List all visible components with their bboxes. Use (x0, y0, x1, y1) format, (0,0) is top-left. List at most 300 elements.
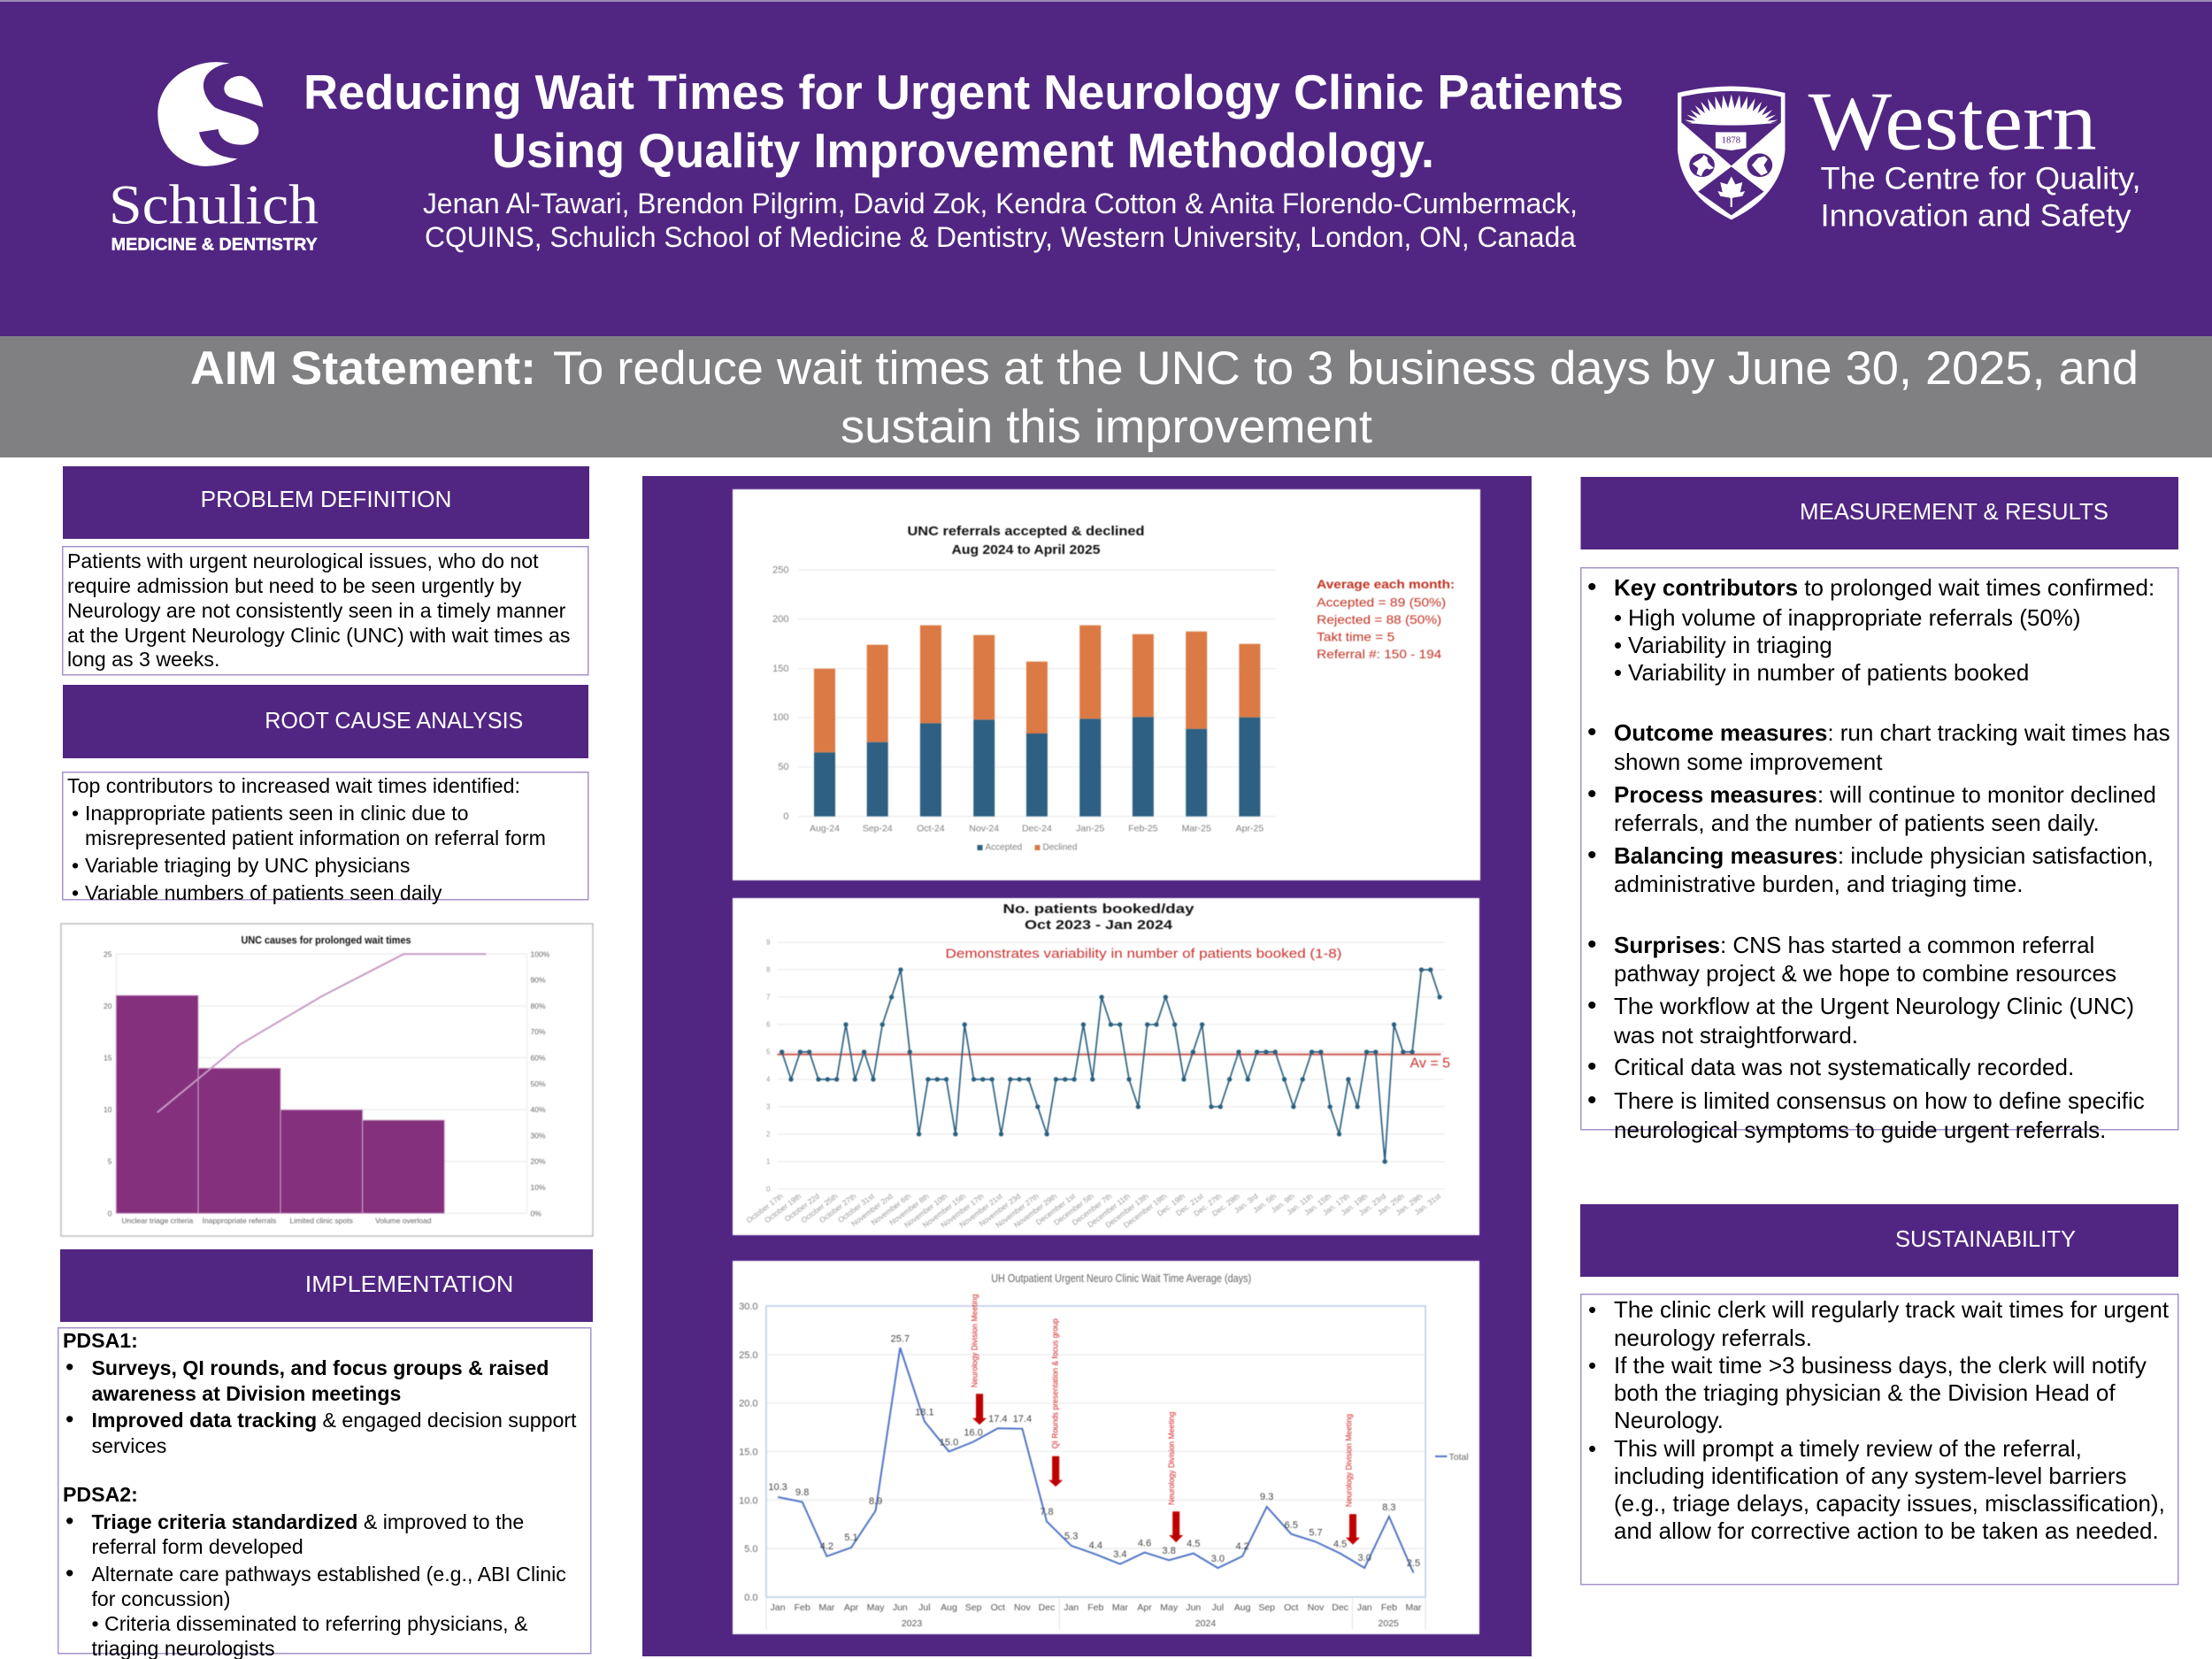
logo subtitle: MEDICINE & DENTISTRY (111, 234, 318, 254)
chart: Pareto causes for prolonged wait times: 5 (107, 1157, 111, 1166)
data labels: 18.1 (915, 1407, 933, 1417)
PDSA2 items: Criteria disseminated to referring physicians, & (104, 1612, 528, 1635)
Western logo (1678, 75, 2141, 234)
chart: wait time average run chart: Aug (1233, 1602, 1250, 1613)
chart: wait time average run chart: 2024 (1194, 1618, 1216, 1629)
text block: problem definition: at the Urgent Neurology Clinic (UNC) with wait times as (67, 624, 570, 647)
date axis labels: November 17th (939, 1191, 986, 1230)
PDSA2 items: • (92, 1612, 99, 1635)
date axis labels: October 31st (836, 1191, 876, 1225)
text block: root cause contributors: misrepresented patient information on referral form (85, 826, 546, 849)
surprises: • (1587, 1086, 1597, 1115)
data labels: 5.1 (844, 1532, 857, 1543)
chart: patients booked per day: 7 (766, 993, 771, 1002)
date axis labels: October 19th (763, 1191, 803, 1225)
chart: Pareto causes for prolonged wait times: 20% (530, 1157, 545, 1166)
chart: Pareto causes for prolonged wait times: 60% (530, 1053, 545, 1062)
chart: Pareto causes for prolonged wait times: 0 (107, 1209, 111, 1217)
AIM statement band: AIM Statement: (190, 342, 536, 395)
date axis labels: November 21st (957, 1191, 1004, 1229)
text block: sustainability plan: Neurology. (1614, 1407, 1724, 1433)
data labels: 10.3 (768, 1482, 787, 1493)
annotation: QI Rounds presentation: QI Rounds presentation & focus group (1050, 1318, 1060, 1448)
annotation: Neurology Division Meeting 2 (1166, 1412, 1183, 1542)
date axis labels: November 2nd (849, 1191, 894, 1228)
chart: wait time average run chart: May (1160, 1602, 1178, 1613)
chart: wait time average run chart: Dec (1332, 1602, 1348, 1613)
key contributors: High volume of inappropriate referrals (50%) (1628, 604, 2081, 631)
logo subtitle: Innovation and Safety (1821, 199, 2131, 234)
text block: root cause contributors: • (72, 854, 79, 877)
chart: wait time average run chart: Apr (1137, 1602, 1152, 1613)
declined bars (814, 626, 1260, 752)
panel: sustainability (1580, 1204, 2178, 1586)
date axis labels: October 27th (818, 1191, 857, 1225)
data labels: 3.8 (1162, 1546, 1175, 1556)
chart: wait time average run chart: Mar (1405, 1602, 1422, 1613)
chart: Pareto causes for prolonged wait times: 30% (530, 1131, 545, 1140)
PDSA1 items: Improved data tracking & engaged decision support (92, 1409, 577, 1432)
chart: wait time average run chart: 5.0 (744, 1544, 757, 1555)
chart: wait time average run chart: Oct (990, 1602, 1005, 1613)
PDSA2 items: Alternate care pathways established (e.g., ABI Clinic (92, 1563, 566, 1586)
chart: patients booked per day: 8 (766, 966, 771, 973)
chart: wait time average run chart: 0.0 (744, 1593, 757, 1603)
measures: shown some improvement (1614, 749, 1883, 775)
average line (777, 1053, 1440, 1056)
data labels: 5.7 (1309, 1527, 1322, 1538)
key contributors: Variability in triaging (1628, 632, 1832, 658)
accepted bars (814, 717, 1260, 817)
logo wordmark: Schulich: Schulich (109, 173, 319, 236)
chart: Pareto causes for prolonged wait times: 40% (530, 1105, 545, 1114)
chart: UNC referrals accepted and declined: Oct-24 (917, 823, 944, 833)
logo subtitle: The Centre for Quality, (1821, 161, 2141, 196)
chart: patients booked per day: No. patients booked/day (1002, 902, 1194, 917)
PDSA2 items (63, 1483, 566, 1659)
PDSA1 items: awareness at Division meetings (92, 1382, 401, 1405)
date axis labels: Dec. 19th (1155, 1191, 1187, 1217)
callout: monthly averages: Average each month: (1317, 577, 1455, 591)
chart: wait time average run chart: Jan (770, 1602, 785, 1613)
logo subtitle (1821, 161, 2141, 234)
bars (116, 995, 444, 1213)
chart: Pareto causes for prolonged wait times: 10 (104, 1105, 111, 1114)
text block: problem definition: require admission but need to be seen urgently by (67, 574, 522, 597)
PDSA1 items: services (92, 1434, 166, 1457)
chart: wait time average run chart: Apr (843, 1602, 858, 1613)
chart: wait time average run chart: Feb (1380, 1602, 1397, 1613)
annotation: variability: Demonstrates variability in number of patients booked (1-8) (945, 947, 1341, 961)
chart: UNC referrals accepted and declined: 150 (772, 664, 788, 674)
chart: UNC referrals accepted and declined: UNC referrals accepted & declined (907, 524, 1144, 539)
date axis labels: Jan. 3rd (1233, 1191, 1259, 1215)
chart: UNC referrals accepted and declined: Aug 2024 to April 2025 (951, 542, 1100, 557)
heading: problem definition: PROBLEM DEFINITION (201, 486, 451, 512)
chart: patients booked per day: Oct 2023 - Jan 2024 (1025, 918, 1172, 933)
text block: sustainability plan (1580, 1294, 2178, 1586)
text block: root cause contributors: • (72, 802, 79, 825)
date axis labels: December 13th (1103, 1191, 1149, 1230)
chart: wait time average run chart: 20.0 (739, 1399, 757, 1409)
date axis labels: December 5th (1052, 1191, 1094, 1227)
legend: Accepted (985, 842, 1022, 853)
legend (1435, 1452, 1468, 1463)
text block: root cause contributors: Top contributors to increased wait times identified: (67, 774, 520, 797)
chart: wait time average run chart: Aug (941, 1602, 956, 1613)
surprises: was not straightforward. (1613, 1022, 1858, 1048)
chart: UNC referrals accepted and declined: Dec-24 (1021, 823, 1051, 833)
chart: wait time average run chart: Jun (892, 1602, 907, 1613)
chart: wait time average run chart: Mar (1111, 1602, 1128, 1613)
chart: Pareto causes for prolonged wait times: 20 (104, 1002, 111, 1010)
date axis labels: Jan. 9th (1269, 1191, 1296, 1215)
chart: patients booked per day (732, 897, 1480, 1236)
PDSA2 items: referral form developed (92, 1535, 303, 1558)
chart: wait time average run chart: Sep (964, 1602, 981, 1613)
date axis labels: November 6th (869, 1191, 912, 1227)
chart: UNC referrals accepted and declined: Feb-25 (1128, 823, 1157, 833)
heading: measurement and results (1580, 477, 2178, 549)
chart: Pareto causes for prolonged wait times: 80% (530, 1002, 545, 1010)
PDSA2 items: Triage criteria standardized & improved to the (92, 1510, 524, 1533)
date axis labels: December 19th (1121, 1191, 1168, 1230)
text block: root cause contributors (62, 772, 589, 904)
date axis labels: Jan. 23rd (1356, 1191, 1387, 1217)
date axis labels: Jan. 19th (1339, 1191, 1369, 1217)
text block: sustainability plan: The clinic clerk will regularly track wait times for urgent (1614, 1296, 2170, 1323)
annotation: average: Av = 5 (1409, 1056, 1450, 1071)
date axis labels: November 27th (994, 1191, 1041, 1230)
data labels: 9.8 (795, 1487, 809, 1498)
chart: UNC referrals accepted and declined: 100 (772, 712, 788, 723)
header banner (0, 0, 2212, 336)
date axis labels (744, 1191, 1442, 1230)
PDSA2 items: for concussion) (92, 1587, 230, 1610)
data labels: 4.4 (1088, 1540, 1102, 1551)
surprises: There is limited consensus on how to define specific (1614, 1087, 2145, 1114)
date axis labels: November 10th (902, 1191, 949, 1230)
text block: sustainability plan: including identification of any system-level barriers (1614, 1463, 2127, 1489)
legend: Declined (1042, 842, 1077, 853)
PDSA1 items (63, 1329, 577, 1457)
date axis labels: Jan. 15th (1302, 1191, 1333, 1217)
cumulative line (157, 954, 486, 1112)
key contributors: • (1587, 572, 1597, 602)
chart: patients booked per day: 5 (766, 1048, 771, 1056)
data labels: 4.5 (1333, 1540, 1347, 1550)
annotation: Neurology Division Meeting 3: Neurology Division Meeting (1344, 1414, 1354, 1507)
data labels: 9.3 (1260, 1492, 1273, 1502)
panel: measurement and results (1580, 477, 2178, 1143)
chart: UNC referrals accepted and declined: 250 (772, 565, 788, 575)
PDSA1 items: • (65, 1406, 73, 1432)
run line (781, 970, 1440, 1162)
measures: • (1587, 780, 1597, 809)
annotation: Neurology Division Meeting 1: Neurology Division Meeting (970, 1294, 979, 1387)
data labels: 16.0 (964, 1428, 982, 1439)
legend: Total (1448, 1452, 1468, 1463)
chart: wait time average run chart: 15.0 (739, 1447, 757, 1457)
data labels: 8.9 (868, 1496, 882, 1507)
callout: monthly averages: Rejected = 88 (50%) (1317, 612, 1441, 626)
surprises: • (1587, 930, 1597, 959)
chart: wait time average run chart: Jan (1064, 1602, 1079, 1613)
data labels: 3.4 (1113, 1549, 1126, 1560)
icon: Western shield (1678, 86, 1785, 219)
data labels: 4.2 (819, 1541, 833, 1552)
text block: sustainability plan: (e.g., triage delays, capacity issues, misclassification), (1614, 1490, 2165, 1517)
measures: referrals, and the number of patients seen daily. (1614, 810, 2100, 836)
date axis labels: November 15th (920, 1191, 967, 1230)
date axis labels: December 11th (1086, 1191, 1132, 1229)
text block: sustainability plan: both the triaging physician & the Division Head of (1614, 1379, 2116, 1406)
panel: problem definition (62, 466, 589, 676)
chart: wait time average run chart: Nov (1307, 1602, 1325, 1613)
chart: UNC referrals accepted and declined: Apr-25 (1235, 823, 1263, 833)
chart: wait time average run chart: Jan (1356, 1602, 1371, 1613)
data labels: 4.2 (1235, 1541, 1248, 1552)
measures: • (1587, 841, 1597, 870)
chart: UNC referrals accepted and declined: 200 (772, 614, 788, 625)
authors: Jenan Al-Tawari, Brendon Pilgrim, David Zok, Kendra Cotton & Anita Florendo-Cumbermack, (423, 188, 1578, 219)
chart: Pareto causes for prolonged wait times: Volume overload (375, 1217, 431, 1225)
data labels (768, 1334, 1420, 1569)
text block: sustainability plan: neurology referrals. (1614, 1325, 1812, 1351)
chart: wait time average run chart: Dec (1038, 1602, 1055, 1613)
surprises: Critical data was not systematically recorded. (1614, 1054, 2074, 1080)
date axis labels: November 8th (887, 1191, 931, 1227)
chart: patients booked per day: 2 (766, 1131, 771, 1138)
text block: results (1580, 567, 2178, 1143)
authors: CQUINS, Schulich School of Medicine & Dentistry, Western University, London, ON, Canada (425, 221, 1576, 253)
chart: wait time average run chart: Jun (1186, 1602, 1201, 1613)
text block: sustainability plan: • (1588, 1352, 1596, 1379)
Schulich logo (109, 62, 319, 254)
text block: problem definition: Neurology are not consistently seen in a timely manner (67, 599, 566, 622)
text block: problem definition (62, 546, 589, 676)
text block: problem definition: Patients with urgent neurological issues, who do not (67, 549, 539, 572)
chart: UNC referrals accepted and declined (732, 488, 1481, 881)
date axis labels: October 22d (782, 1191, 821, 1224)
key contributors: Key contributors to prolonged wait times confirmed: (1614, 574, 2154, 601)
chart: wait time average run chart: Mar (818, 1602, 834, 1613)
AIM statement band (0, 336, 2212, 457)
chart: wait time average run chart: Sep (1258, 1602, 1275, 1613)
callout: monthly averages: Referral #: 150 - 194 (1317, 647, 1441, 661)
key contributors: • (1614, 604, 1622, 631)
title (303, 65, 1624, 178)
authors (423, 188, 1578, 253)
surprises: • (1587, 991, 1597, 1020)
legend (977, 842, 1077, 853)
chart: patients booked per day: 0 (766, 1186, 771, 1193)
key contributors: Variability in number of patients booked (1628, 659, 2029, 686)
chart: wait time average run chart: 2023 (901, 1618, 922, 1629)
surprises (1587, 930, 2145, 1143)
chart: wait time average run chart: 25.0 (739, 1350, 757, 1361)
AIM statement band: sustain this improvement (841, 401, 1372, 453)
heading: implementation: IMPLEMENTATION (305, 1271, 513, 1297)
chart: UNC referrals accepted and declined: Mar-25 (1181, 823, 1210, 833)
chart: wait time average run chart: Nov (1014, 1602, 1031, 1613)
date axis labels: December 1st (1033, 1191, 1077, 1226)
data labels: 17.4 (1012, 1414, 1032, 1425)
heading: measurement and results: MEASUREMENT & RESULTS (1800, 498, 2108, 525)
annotation: Neurology Division Meeting 1 (970, 1294, 987, 1425)
chart: patients booked per day: 3 (766, 1102, 771, 1111)
chart: wait time average run chart: May (866, 1602, 885, 1613)
heading: sustainability: SUSTAINABILITY (1895, 1225, 2076, 1252)
text block: root cause contributors: Variable numbers of patients seen daily (85, 881, 442, 904)
key contributors (1587, 572, 2154, 686)
chart: UNC referrals accepted and declined: Jan-25 (1076, 823, 1104, 833)
text block: sustainability plan: and allow for corrective action to be taken as needed. (1614, 1517, 2159, 1544)
chart: wait time average run chart: Oct (1284, 1602, 1298, 1613)
data labels: 3.0 (1357, 1553, 1371, 1563)
data labels: 25.7 (890, 1334, 910, 1345)
data labels: 5.3 (1064, 1531, 1078, 1541)
data labels: 4.5 (1187, 1539, 1200, 1549)
chart: Pareto causes for prolonged wait times: 25 (104, 949, 111, 958)
chart: wait time average run chart: 10.0 (739, 1495, 757, 1506)
date axis labels: November 23d (977, 1191, 1022, 1228)
text block: sustainability plan: This will prompt a timely review of the referral, (1614, 1435, 2082, 1462)
PDSA2 items: • (65, 1560, 73, 1586)
date axis labels: Jan. 17th (1320, 1191, 1351, 1217)
date axis labels: October 17th (744, 1191, 784, 1225)
icon: Western shield: 1878 (1722, 136, 1740, 146)
icon: Schulich S crescent (157, 62, 263, 166)
PDSA1 items: Surveys, QI rounds, and focus groups & raised (92, 1356, 549, 1379)
data labels: 8.3 (1382, 1502, 1395, 1513)
measures: Outcome measures: run chart tracking wait times has (1614, 719, 2170, 746)
surprises: • (1587, 1052, 1597, 1081)
measures: administrative burden, and triaging time. (1614, 871, 2023, 897)
PDSA1 items: • (65, 1354, 73, 1380)
callout: monthly averages: Accepted = 89 (50%) (1317, 595, 1446, 610)
text block: sustainability plan: • (1588, 1296, 1596, 1323)
chart: Pareto causes for prolonged wait times: 0% (530, 1209, 541, 1217)
data labels: 6.5 (1284, 1520, 1297, 1531)
date axis labels: December 7th (1070, 1191, 1113, 1227)
date axis labels: Jan. 29th (1394, 1191, 1424, 1217)
text block: sustainability plan: • (1588, 1435, 1596, 1462)
date axis labels: Jan. 11th (1285, 1191, 1314, 1217)
callout: monthly averages: Takt time = 5 (1317, 629, 1394, 643)
chart: patients booked per day: 9 (766, 938, 771, 947)
measures: Balancing measures: include physician satisfaction, (1614, 842, 2154, 869)
heading: sustainability (1580, 1204, 2178, 1277)
chart: Pareto causes for prolonged wait times: 100% (530, 949, 549, 958)
surprises: pathway project & we hope to combine resources (1614, 960, 2116, 987)
date axis labels: Dec. 21st (1174, 1191, 1205, 1217)
measures: Process measures: will continue to monitor declined (1614, 781, 2156, 808)
date axis labels: Jan. 5th (1251, 1191, 1278, 1215)
chart: UNC referrals accepted and declined: Sep-24 (862, 823, 892, 833)
data labels: 17.4 (988, 1414, 1007, 1425)
chart: Pareto causes for prolonged wait times: Limited clinic spots (289, 1217, 352, 1225)
date axis labels: October 25th (799, 1191, 839, 1225)
text block: root cause contributors: Variable triaging by UNC physicians (85, 854, 410, 877)
chart: UNC referrals accepted and declined: Nov-24 (969, 823, 999, 833)
AIM statement band: To reduce wait times at the UNC to 3 business days by June 30, 2025, and (553, 342, 2139, 395)
panel: root cause analysis (62, 685, 589, 904)
data labels: 15.0 (939, 1437, 958, 1448)
chart: patients booked per day: 4 (766, 1076, 771, 1083)
data labels: 2.5 (1406, 1558, 1420, 1569)
date axis labels: November 29th (1011, 1191, 1058, 1230)
panel: central charts (642, 476, 1532, 1656)
chart: UNC referrals accepted and declined: 0 (783, 811, 788, 822)
chart: patients booked per day: 1 (766, 1157, 771, 1166)
text block: root cause contributors: • (72, 881, 79, 904)
chart: wait time average run chart: UH Outpatient Urgent Neuro Clinic Wait Time Average (days) (991, 1272, 1251, 1285)
annotation: QI Rounds presentation (1048, 1318, 1063, 1486)
chart: Pareto causes for prolonged wait times: Unclear triage criteria (121, 1217, 193, 1225)
text block: problem definition: long as 3 weeks. (67, 648, 219, 671)
chart: wait time average run chart: Feb (794, 1602, 810, 1613)
text block: PDSA cycles (58, 1327, 591, 1659)
chart: Pareto causes for prolonged wait times: 15 (104, 1053, 111, 1062)
data labels: 3.0 (1210, 1554, 1225, 1564)
surprises: neurological symptoms to guide urgent referrals. (1614, 1117, 2106, 1143)
callout: monthly averages (1317, 577, 1455, 661)
title: Using Quality Improvement Methodology. (492, 123, 1434, 178)
key contributors: • (1614, 659, 1622, 686)
PDSA1 items: PDSA1: (63, 1329, 138, 1352)
text block: sustainability plan: If the wait time >3 business days, the clerk will notify (1614, 1352, 2147, 1379)
annotation: Neurology Division Meeting 2: Neurology Division Meeting (1166, 1412, 1176, 1505)
chart: Pareto causes for prolonged wait times: 90% (530, 976, 545, 985)
surprises: The workflow at the Urgent Neurology Clinic (UNC) (1614, 993, 2134, 1019)
chart: Pareto causes for prolonged wait times: 70% (530, 1027, 545, 1036)
chart: wait time average run chart: 30.0 (739, 1302, 757, 1312)
chart: wait time average run chart: 2025 (1378, 1618, 1399, 1629)
chart: Pareto causes for prolonged wait times: Inappropriate referrals (202, 1217, 276, 1225)
data labels: 7.8 (1040, 1507, 1053, 1517)
data labels: 4.6 (1137, 1538, 1151, 1548)
key contributors: • (1614, 632, 1622, 658)
heading: implementation (60, 1249, 593, 1322)
PDSA2 items: PDSA2: (63, 1483, 138, 1506)
measures (1587, 718, 2170, 897)
chart: Pareto causes for prolonged wait times (60, 922, 595, 1237)
text block: root cause contributors: Inappropriate patients seen in clinic due to (85, 802, 469, 825)
heading: problem definition (63, 466, 589, 539)
chart: Pareto causes for prolonged wait times: UNC causes for prolonged wait times (241, 936, 411, 947)
chart: wait time average run chart: Jul (1211, 1602, 1224, 1613)
chart: Pareto causes for prolonged wait times: 10% (530, 1183, 545, 1192)
chart: wait time average run chart: Feb (1087, 1602, 1103, 1613)
date axis labels: Jan. 25th (1375, 1191, 1406, 1217)
chart: wait time average run chart (732, 1260, 1480, 1635)
heading: root cause analysis (63, 685, 588, 758)
chart: wait time average run chart: Jul (918, 1602, 930, 1613)
annotation: Neurology Division Meeting 3 (1344, 1414, 1359, 1545)
heading: root cause analysis: ROOT CAUSE ANALYSIS (265, 707, 523, 733)
date axis labels: Dec. 27th (1192, 1191, 1223, 1217)
wait time line (778, 1348, 1413, 1573)
measures: • (1587, 718, 1597, 747)
title: Reducing Wait Times for Urgent Neurology Clinic Patients (303, 65, 1624, 119)
panel: implementation (58, 1249, 593, 1659)
date axis labels: Dec. 29th (1210, 1191, 1241, 1217)
date axis labels: Jan. 31st (1412, 1191, 1442, 1217)
logo wordmark: Western: Western (1809, 75, 2097, 167)
chart: UNC referrals accepted and declined: 50 (778, 762, 788, 772)
surprises: Surprises: CNS has started a common referral (1614, 932, 2094, 958)
